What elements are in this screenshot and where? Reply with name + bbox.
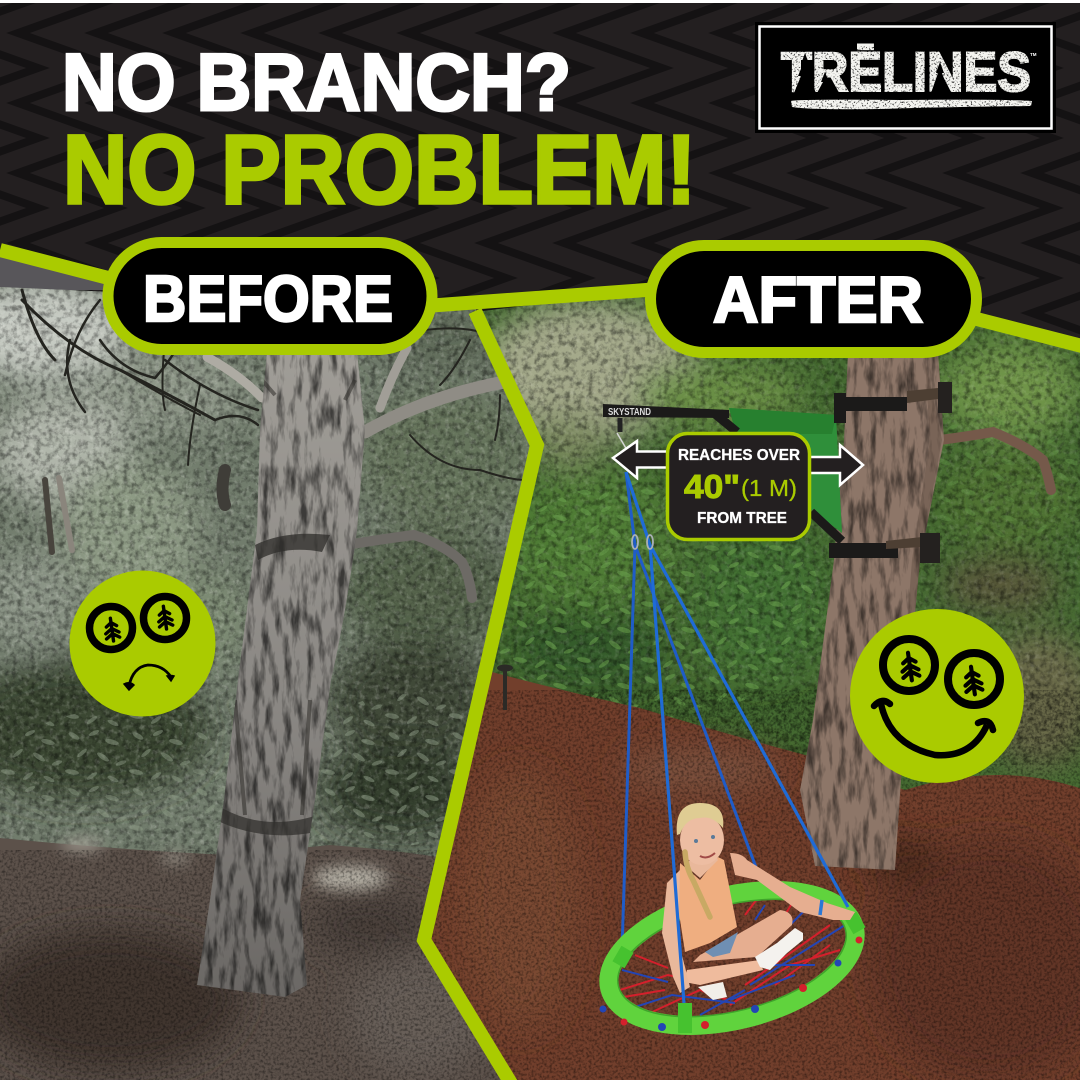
gray triangle under before line (0, 255, 110, 290)
logo: Trelines (755, 22, 1056, 133)
skystand fabric (729, 408, 842, 533)
branch after (940, 432, 1051, 490)
label: after (650, 246, 976, 352)
callout: reaches over 40 inches: 40" (684, 468, 740, 505)
thin background trees before (45, 470, 225, 552)
bare branches before (22, 290, 525, 480)
left arm (662, 870, 690, 993)
title: NO PROBLEM! (63, 115, 696, 224)
head (680, 818, 724, 860)
dark chevron header background (0, 3, 1080, 348)
lime frame lines (0, 250, 1080, 1080)
leaf texture after (484, 297, 1080, 765)
girl on swing (662, 803, 855, 1000)
panel: after photo (420, 285, 1080, 1080)
arrow: reach double arrow (613, 441, 863, 485)
sunlit patches before (60, 839, 388, 890)
back swing ropes (622, 472, 757, 950)
bush leaves before (1, 714, 230, 831)
branches before (207, 348, 510, 598)
hair (677, 803, 723, 835)
braid (685, 852, 710, 917)
title (62, 38, 696, 224)
label: before: BEFORE (143, 262, 393, 335)
callout: reaches over 40 inches: (1 M) (741, 475, 797, 501)
ground shading after (460, 750, 1080, 1080)
tank top (679, 857, 737, 952)
swing ring (599, 881, 866, 1035)
foliage tones after (480, 300, 1080, 770)
tree trunk after (800, 356, 944, 870)
foliage tones before (0, 280, 540, 840)
skystand frame (603, 382, 952, 563)
title: NO BRANCH? (62, 38, 571, 128)
label: before (108, 242, 432, 350)
skystand wordmark: SKYSTAND (608, 407, 651, 418)
front swing ropes (626, 472, 848, 1003)
white shoe upper (755, 928, 803, 970)
ground before (0, 838, 540, 1080)
swing net (618, 890, 845, 1015)
white shoe lower (698, 982, 727, 1000)
red-brown ground (420, 672, 1080, 1080)
label: after: AFTER (713, 263, 923, 336)
icon: sad face (70, 570, 216, 716)
face (694, 835, 715, 857)
right arm (730, 853, 855, 920)
logo: Trelines: TRĒLINES (781, 40, 1031, 103)
lamp post (497, 664, 513, 710)
callout: reaches over 40 inches: REACHES OVER (678, 447, 800, 464)
callout: reaches over 40 inches (668, 434, 810, 540)
leaf texture before (0, 285, 540, 855)
lower leg (684, 960, 763, 985)
shorts (705, 932, 738, 957)
neck (689, 858, 718, 878)
bracelet (820, 900, 822, 915)
ground shading before (0, 895, 490, 1075)
icon: happy face (850, 609, 1024, 783)
logo: Trelines: TM (1030, 52, 1037, 57)
tree trunk before (197, 355, 365, 997)
upper leg (693, 910, 792, 962)
carabiners (632, 535, 653, 549)
panel: before photo (0, 280, 540, 1080)
callout: reaches over 40 inches: FROM TREE (697, 510, 787, 527)
bush leaves after (480, 480, 820, 720)
